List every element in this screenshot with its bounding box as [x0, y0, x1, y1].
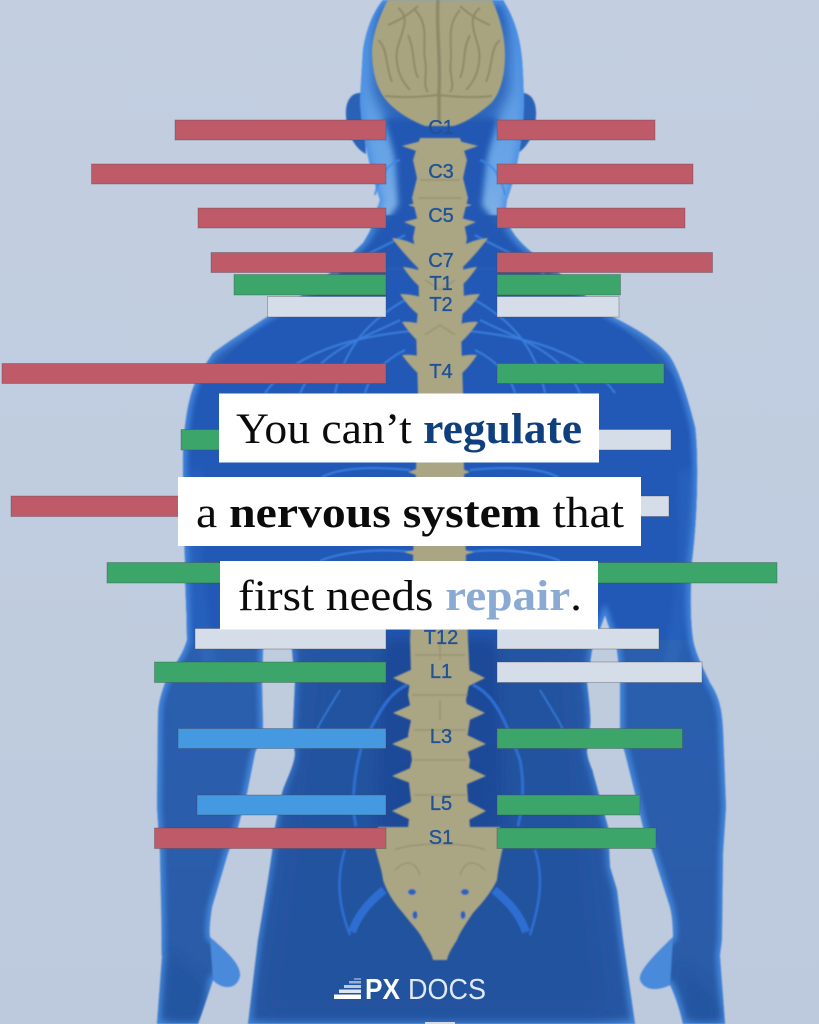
icon: stair steps [334, 978, 361, 999]
vertebra labels: C5 [428, 205, 454, 227]
vertebral column [408, 138, 470, 828]
headline line 1 [219, 394, 599, 462]
transverse processes [392, 140, 488, 822]
right status bars [497, 120, 777, 848]
logo: PX DOCS: DOCS [408, 974, 486, 1006]
vertebra labels: S1 [429, 827, 453, 849]
vertebra labels: T1 [429, 273, 453, 295]
vertebra labels: T12 [424, 627, 458, 649]
headline line 2: a nervous system that [196, 490, 624, 537]
body fill [157, 0, 726, 1024]
spine [375, 138, 503, 960]
headline line 3 [220, 561, 598, 630]
vertebra labels: C7 [428, 250, 454, 272]
bone detail [395, 180, 485, 875]
vertebra labels: T2 [429, 294, 453, 316]
vertebra labels: L3 [430, 726, 452, 748]
human body silhouette [157, 0, 726, 1024]
headline line 3: first needs repair . [238, 573, 582, 620]
icon: left ear [346, 93, 366, 154]
headline line 1: You can’t regulate [236, 406, 582, 453]
left status bars [2, 120, 386, 848]
wordmark: PX [365, 974, 401, 1006]
sacrum [375, 827, 503, 960]
lumbar nerve arcs [340, 685, 540, 935]
vertebra labels: L1 [430, 661, 452, 683]
vertebra labels: C1 [428, 117, 454, 139]
body shading [157, 0, 726, 1024]
logo: PX DOCS [334, 974, 486, 1006]
icon: right ear [516, 93, 536, 154]
bottom edge mark [425, 1022, 455, 1024]
brain folds [378, 0, 500, 122]
vertebra labels [424, 117, 458, 849]
nerves and veins [265, 160, 615, 735]
vertebra labels: C3 [428, 161, 454, 183]
vertebra labels: L5 [430, 793, 452, 815]
headline line 2 [178, 477, 641, 546]
vertebra labels: T4 [429, 361, 453, 383]
brain [372, 0, 505, 126]
sacral foramina [408, 889, 469, 919]
